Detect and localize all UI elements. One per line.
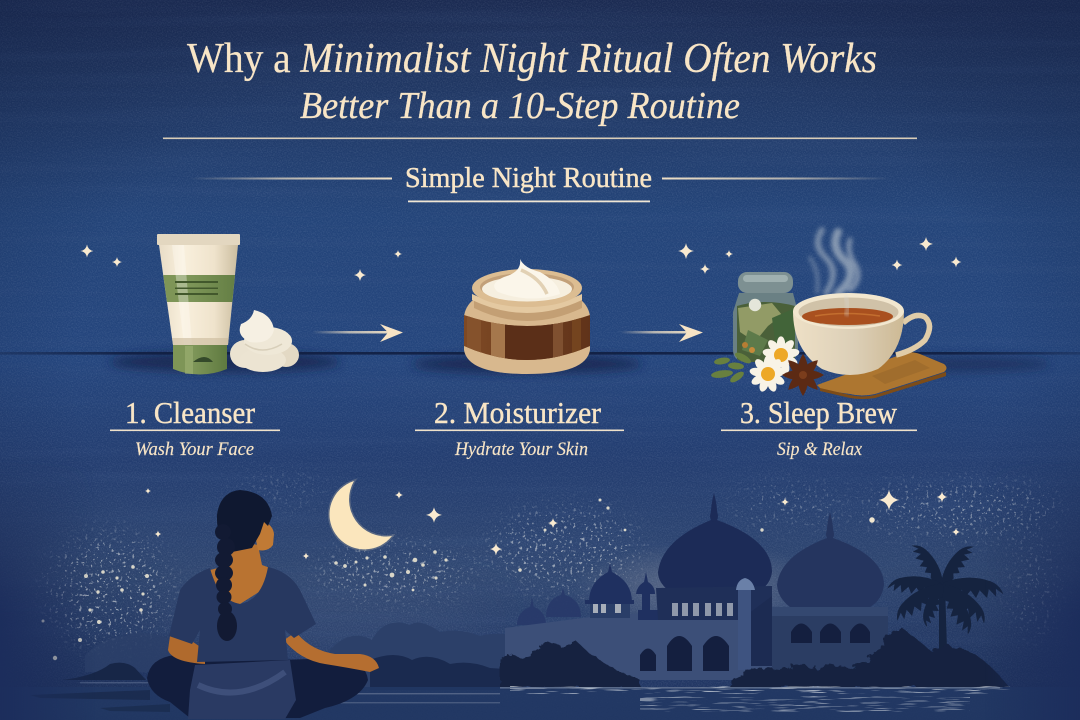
title: Better Than a 10-Step Routine [300,85,740,127]
palace silhouette [505,493,888,680]
step 1 label: 1. Cleanser [125,395,256,430]
step 3 label: Sip & Relax [777,439,863,460]
step 2 label: Hydrate Your Skin [454,439,588,460]
step 2 label [415,395,624,460]
title [187,36,877,127]
icon: chamomile flowers [749,336,800,393]
night stars [145,488,960,560]
step 1 label: Wash Your Face [135,439,254,460]
section heading: Simple Night Routine: Simple Night Routine [405,163,652,194]
starfield speckle [36,463,1068,660]
palm tree [887,539,1005,650]
icon: leaves [711,351,752,384]
title: Why a Minimalist Night Ritual Often Works [187,36,877,82]
woman meditating [147,490,379,719]
water reflection [44,682,1016,720]
icon: foam [230,310,299,372]
stars around the products [80,237,962,281]
icon: steam [810,230,858,293]
step 2 label: 2. Moisturizer [434,395,602,430]
icon: wooden board [817,352,946,399]
icon: star anise [782,354,824,396]
step 1 label [110,395,280,460]
step 3 label [721,395,917,460]
arrow: cleanser to moisturizer [312,324,403,342]
icon: tea cup [793,293,930,375]
foreground bushes [500,628,1010,688]
edge vignette [0,498,1080,720]
horizon shadow line [0,352,1080,373]
icon: crescent moon [329,481,392,549]
background tree line [62,623,530,690]
arrow: moisturizer to sleep brew [620,324,703,342]
icon: cleanser tube [155,234,245,374]
icon: herb jar [733,272,798,362]
icon: moisturizer jar [464,259,590,374]
step 3 label: 3. Sleep Brew [740,395,898,430]
